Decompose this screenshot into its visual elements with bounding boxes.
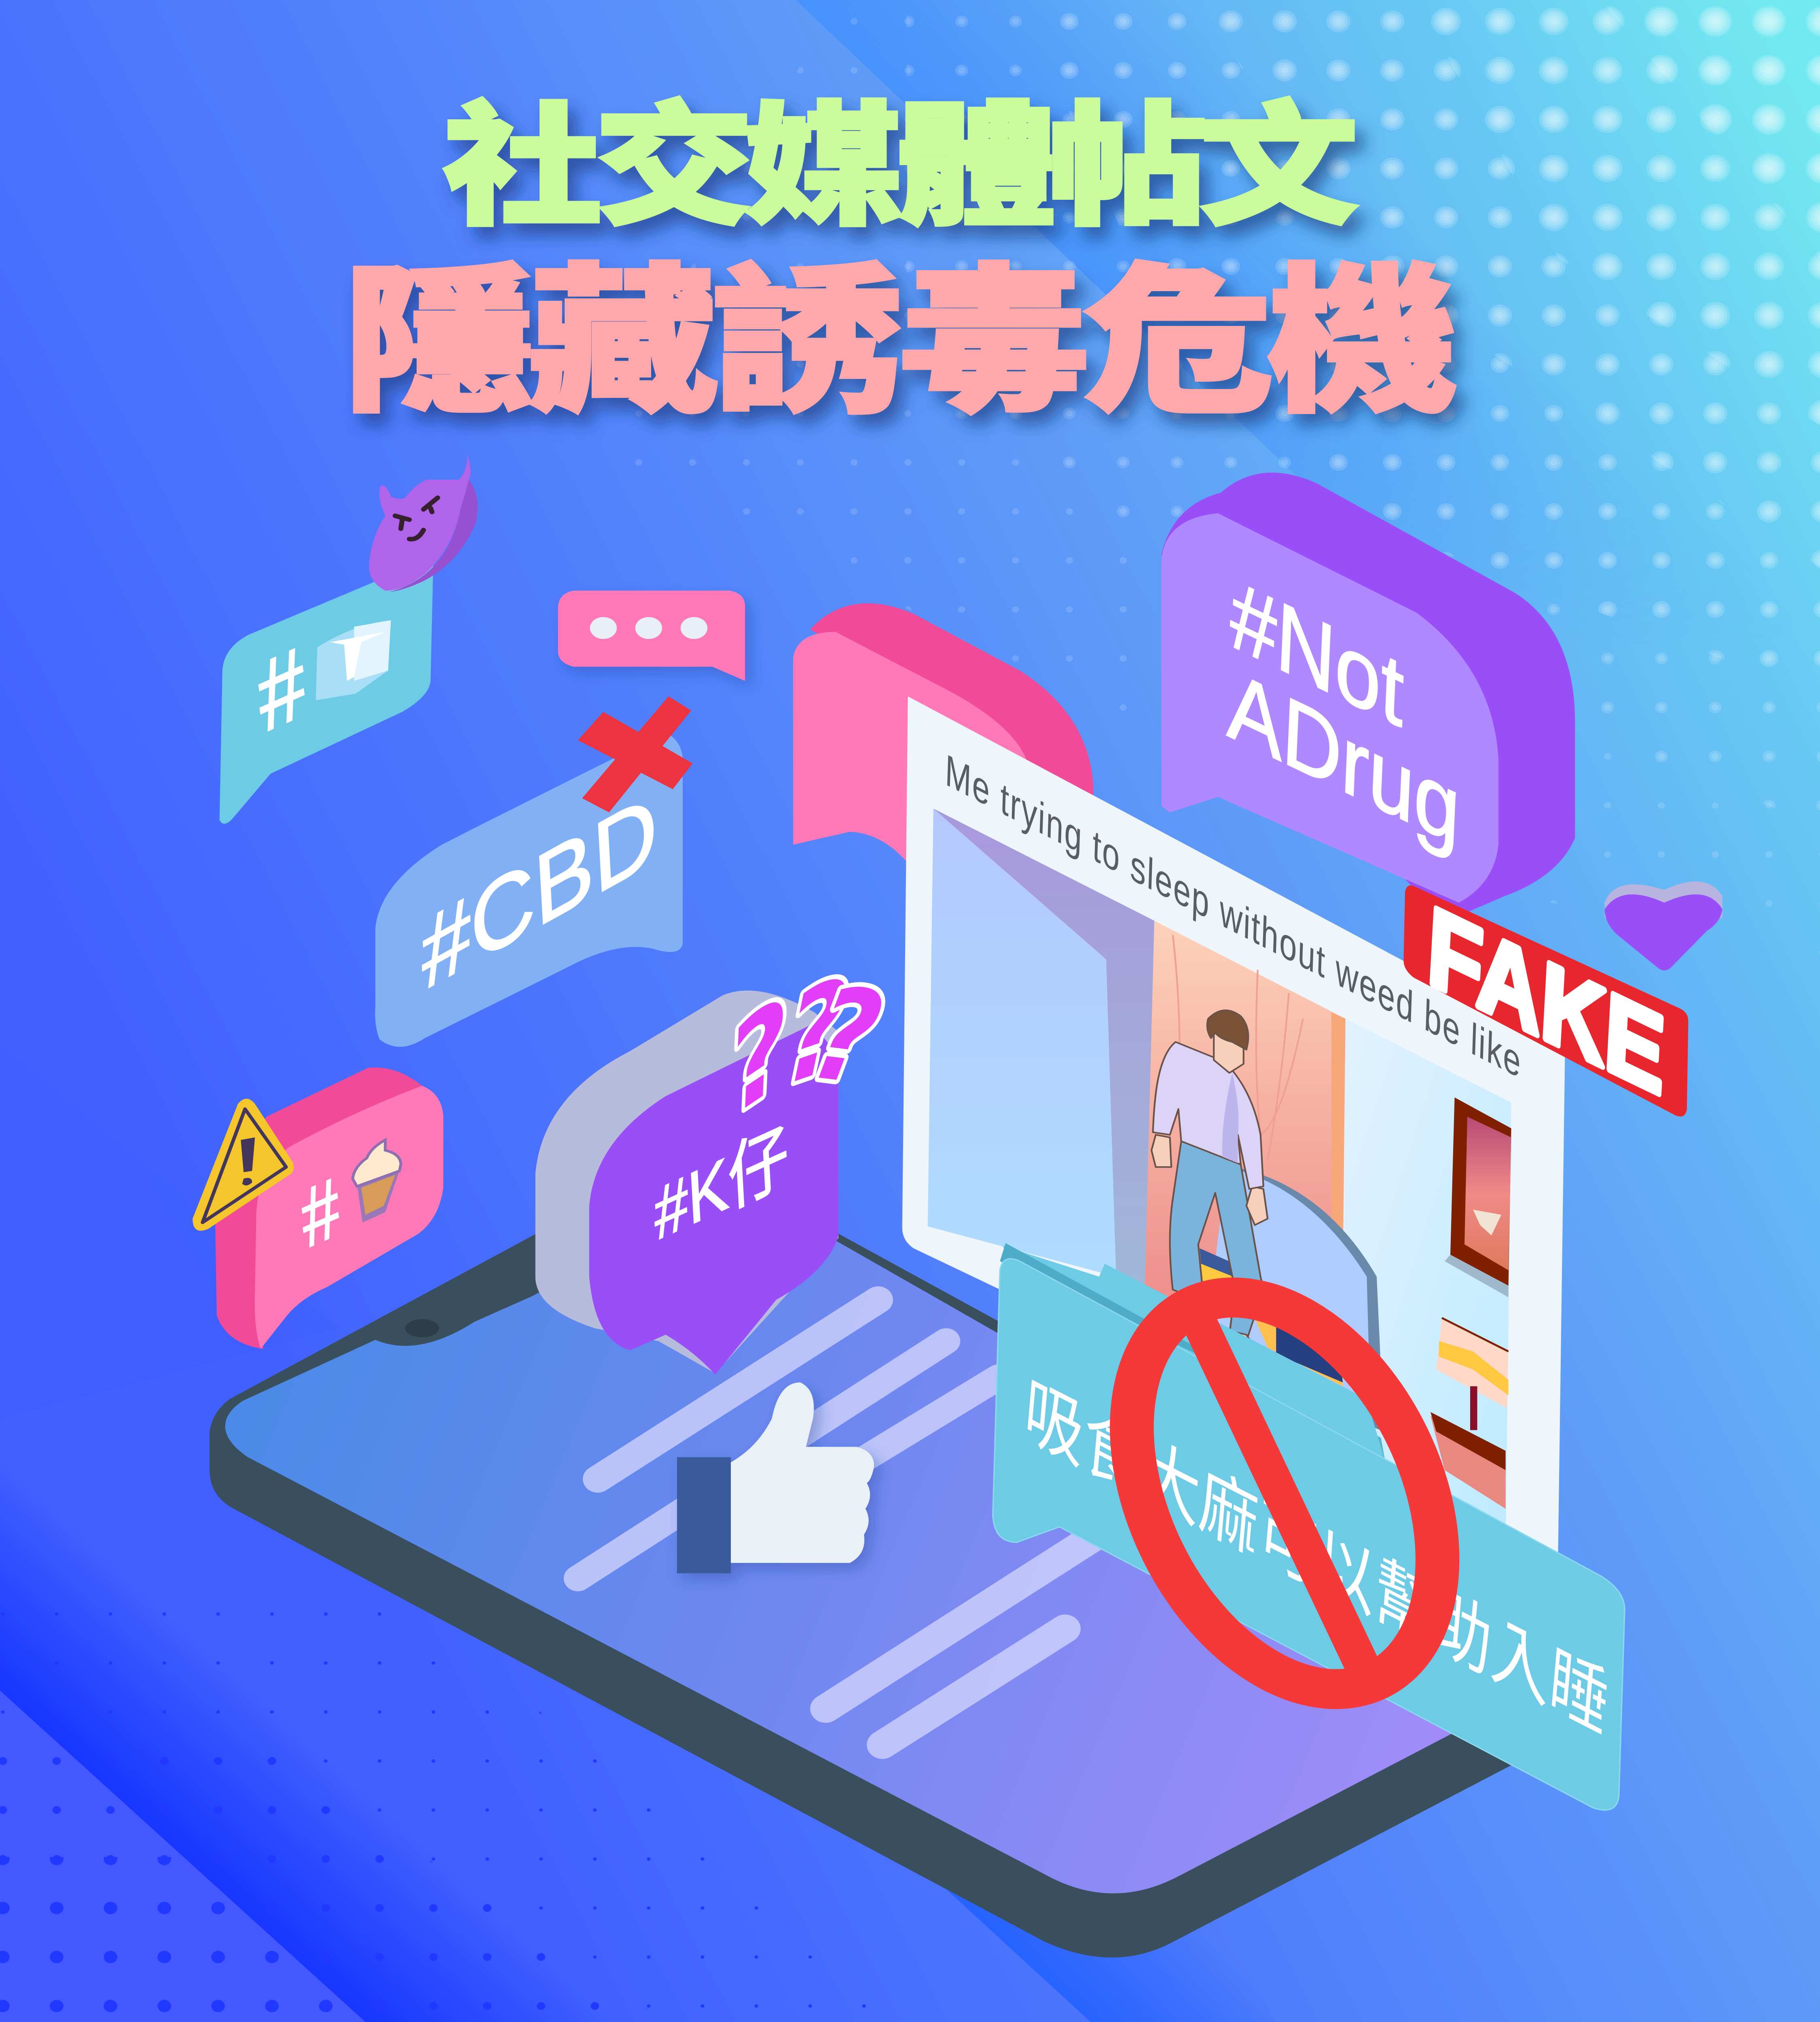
- framed picture: [1445, 1098, 1511, 1297]
- question marks: ?: [791, 961, 903, 1112]
- title line 2: 誘: [712, 253, 902, 431]
- screen content lines: [578, 1300, 1098, 1745]
- person: [1151, 1010, 1268, 1357]
- jeans: [1170, 1141, 1263, 1341]
- title line 1: 媒: [745, 92, 904, 241]
- arched mirror: [1218, 1167, 1384, 1432]
- prohibition sign: [1073, 1256, 1496, 1730]
- teal hashtag bubble: [220, 557, 434, 824]
- hand: [731, 1382, 874, 1563]
- banner front: [993, 1259, 1625, 1810]
- bed: [1200, 1248, 1388, 1476]
- hashtag text: #Not: [1228, 558, 1406, 748]
- hash: #: [296, 1160, 345, 1266]
- banner: [993, 1243, 1625, 1810]
- icon: devil: [369, 455, 478, 592]
- foot: [1218, 1328, 1261, 1357]
- room: right wall: [1343, 1019, 1511, 1548]
- icon: warning triangle: [193, 1099, 294, 1231]
- icon: ice cream cone: [353, 1140, 401, 1223]
- three dots: [590, 617, 707, 639]
- social media post: [902, 696, 1565, 1560]
- phone body: [210, 1152, 1579, 1958]
- banner text: 吸食大麻可以幫助入睡: [1021, 1366, 1612, 1749]
- title line 1: 交: [595, 92, 753, 241]
- cuff: [677, 1457, 731, 1573]
- pink bubble with ice cream: [215, 1068, 443, 1349]
- post caption: Me trying to sleep without weed be like: [944, 745, 1522, 1087]
- title line 1: [443, 92, 1358, 241]
- icon: heart: [1605, 882, 1722, 971]
- phone camera notch: [405, 1319, 439, 1337]
- title line 1: 文: [1200, 92, 1358, 241]
- head: [1214, 1028, 1244, 1073]
- banner fold: [1003, 1246, 1395, 1496]
- room: wood wall: [1145, 921, 1346, 1303]
- title line 2: 危: [1084, 253, 1273, 431]
- ice cube icon: [316, 620, 391, 700]
- sweatshirt: [1153, 1042, 1263, 1189]
- typing bubble: [558, 590, 745, 681]
- room: shadow strip: [933, 808, 1154, 1296]
- room: left panel: [928, 808, 1116, 1277]
- big pink bubble: [793, 603, 1094, 903]
- hashtag text: ADrug: [1225, 649, 1462, 866]
- title line 1: 體: [897, 92, 1055, 241]
- title line 2: 藏: [528, 253, 718, 431]
- K bubble: [535, 947, 903, 1375]
- question marks: ?: [727, 965, 791, 1148]
- CBD text: #CBD: [419, 771, 660, 1011]
- title line 2: [344, 253, 1457, 431]
- title line 2: 機: [1268, 253, 1457, 431]
- K text: #K仔: [652, 1115, 791, 1256]
- title line 1: 社: [443, 92, 602, 241]
- phone: [210, 1152, 1579, 1958]
- question marks: [727, 947, 903, 1148]
- post frame: [902, 696, 1565, 1560]
- FAKE tag: FAKE: [1425, 882, 1668, 1119]
- title line 2: 毒: [899, 253, 1089, 431]
- CBD bubble: [375, 696, 692, 1047]
- red cross: [578, 696, 692, 812]
- hashtag: #: [251, 626, 312, 753]
- question marks: ?: [771, 947, 861, 1118]
- thumbs up: [677, 1382, 874, 1573]
- NotADrug bubble: [1162, 473, 1575, 922]
- phone screen: [225, 1212, 1565, 1893]
- title line 2: 隱: [344, 253, 534, 431]
- table lamp: [1431, 1318, 1509, 1509]
- title line 1: 帖: [1048, 92, 1207, 241]
- hands: [1151, 1135, 1268, 1225]
